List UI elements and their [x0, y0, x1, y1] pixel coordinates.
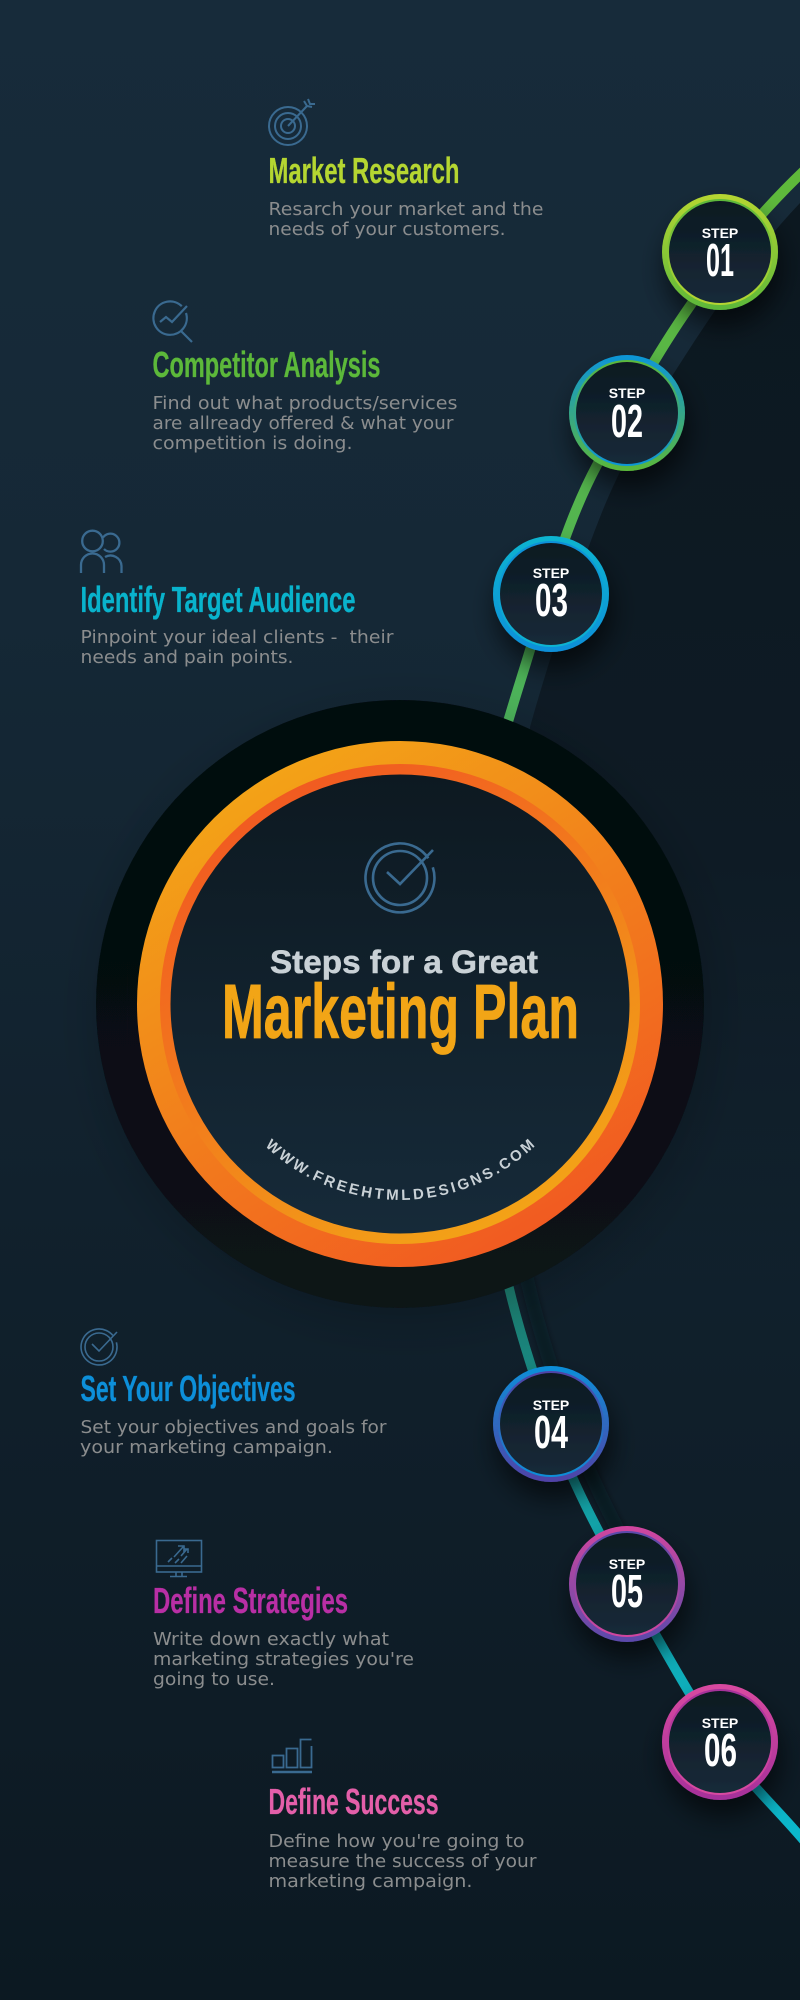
- step badge 01: 01: [706, 234, 734, 286]
- icon: people: [81, 531, 122, 573]
- description: needs and pain points.: [80, 648, 294, 668]
- description: [268, 1832, 537, 1892]
- step badge 03: STEP: [533, 565, 569, 581]
- description: measure the success of your: [268, 1852, 537, 1872]
- panel: identify target audience: [80, 531, 394, 668]
- icon: checkmark: [81, 1329, 117, 1365]
- step badge 04: [493, 1366, 609, 1482]
- step badge 05: 05: [611, 1565, 643, 1617]
- shadow strip for lower timeline: [525, 1270, 647, 1584]
- step badge 06: 06: [704, 1724, 737, 1776]
- website curved text: WWW.FREEHTMLDESIGNS.COM: [266, 1138, 534, 1200]
- inner red-orange ring: [160, 764, 640, 1244]
- step badge 06: STEP: [702, 1715, 738, 1731]
- description: Pinpoint your ideal clients - their: [80, 628, 394, 648]
- step badge 04: STEP: [533, 1397, 569, 1413]
- orange ring: [137, 741, 663, 1267]
- title line 1: Steps for a Great: [270, 944, 538, 980]
- heading: Identify Target Audience: [80, 579, 356, 620]
- icon: monitor with arrows: [156, 1540, 202, 1576]
- panel: set your objectives: [80, 1329, 387, 1458]
- description: [80, 1418, 387, 1458]
- central circle: [96, 700, 704, 1308]
- panel: define strategies: [153, 1540, 414, 1690]
- icon: bar chart: [272, 1740, 312, 1772]
- step badge 05: STEP: [609, 1556, 645, 1572]
- heading: Define Strategies: [153, 1580, 348, 1621]
- step badge 01: STEP: [702, 225, 738, 241]
- step badge 02: STEP: [609, 385, 645, 401]
- navy centre: [170, 774, 630, 1234]
- description: [152, 394, 458, 454]
- title line 2: Marketing Plan: [222, 969, 579, 1055]
- heading: Competitor Analysis: [152, 344, 380, 385]
- panel: market research: [268, 99, 544, 240]
- panel: define success: [268, 1740, 537, 1892]
- dark shaded area right of the timeline: [530, 203, 800, 1300]
- timeline lower segment: [505, 1270, 800, 1848]
- step badge 03: 03: [535, 574, 568, 626]
- description: marketing strategies you're: [153, 1650, 414, 1670]
- description: competition is doing.: [152, 434, 352, 454]
- icon: target: [269, 99, 315, 145]
- description: [80, 628, 394, 668]
- description: Write down exactly what: [153, 1630, 389, 1650]
- heading: Define Success: [268, 1781, 438, 1822]
- heading: Market Research: [268, 150, 460, 191]
- description: Define how you're going to: [268, 1832, 524, 1852]
- panel: competitor analysis: [152, 301, 458, 454]
- icon: checkmark badge: [365, 843, 434, 912]
- timeline upper segment: [500, 165, 800, 750]
- step badge 02: [569, 355, 685, 471]
- icon: magnifier chart: [153, 301, 192, 342]
- description: [268, 200, 544, 240]
- step badge 06: [662, 1684, 778, 1800]
- description: needs of your customers.: [268, 220, 506, 240]
- description: Resarch your market and the: [268, 200, 544, 220]
- step badge 02: 02: [611, 395, 643, 447]
- step badge 04: 04: [534, 1406, 568, 1458]
- description: going to use.: [153, 1670, 275, 1690]
- description: marketing campaign.: [268, 1872, 472, 1892]
- description: [153, 1630, 414, 1690]
- outer black disc: [96, 700, 704, 1308]
- description: your marketing campaign.: [80, 1438, 333, 1458]
- description: Find out what products/services: [152, 394, 458, 414]
- step badge 01: [662, 194, 778, 310]
- step badge 03: [493, 536, 609, 652]
- heading: Set Your Objectives: [80, 1368, 296, 1409]
- description: Set your objectives and goals for: [80, 1418, 387, 1438]
- description: are allready offered & what your: [152, 414, 454, 434]
- step badge 05: [569, 1526, 685, 1642]
